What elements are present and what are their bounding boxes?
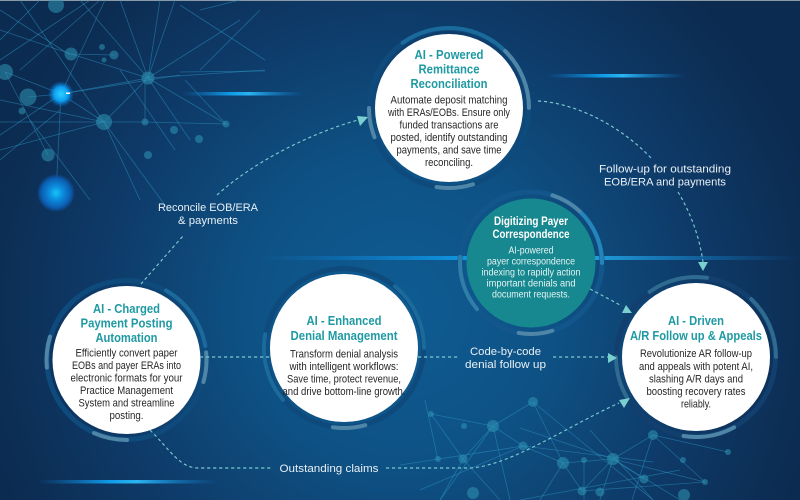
panel: payment posting automation [17, 251, 236, 469]
arrow: reconcile EOB/ERA to remittance [141, 116, 368, 284]
label: reconcile: & payments [178, 215, 238, 227]
body text: AI-powered [508, 246, 554, 256]
body text [70, 348, 183, 422]
body text: Automate deposit matching [390, 94, 508, 106]
icon: bright network node [48, 81, 74, 107]
body text: posting. [110, 410, 144, 422]
body text: important denials and [486, 278, 576, 290]
light streaks [38, 74, 800, 484]
body text: slashing A/R days and [649, 374, 743, 386]
icon: glowing orb [38, 174, 74, 212]
ring [431, 163, 631, 363]
panel: remittance reconciliation [336, 0, 562, 221]
heading [410, 47, 488, 91]
network graphic: bottom right [400, 397, 731, 500]
body text: Revolutionize AR follow-up [640, 348, 752, 360]
body text: System and streamline [78, 398, 175, 410]
body text: posted, identify outstanding [390, 132, 508, 144]
body text: Transform denial analysis [290, 348, 398, 360]
label: follow-up: Follow-up for outstanding [599, 164, 731, 176]
body text: with ERAs/EOBs. Ensure only [387, 107, 511, 119]
arrow: posting to denial management [200, 356, 270, 358]
network graphic: top left [0, 0, 265, 212]
body text [387, 94, 511, 169]
body text: reconciling. [425, 157, 473, 169]
body text: electronic formats for your [70, 372, 183, 384]
body text: EOBs and payer ERAs into [72, 360, 181, 372]
heading: Payment Posting [80, 316, 173, 330]
heading: AI - Charged [93, 301, 160, 316]
body text: and appeals with potent AI, [639, 361, 753, 373]
arrow: follow-up to A/R [538, 101, 708, 271]
body text: Efficiently convert paper [76, 348, 178, 360]
body text [482, 246, 580, 300]
label: outstanding claims: Outstanding claims [280, 463, 378, 475]
heading [492, 214, 570, 241]
label: code-by-code: denial follow up [465, 359, 546, 371]
panel: A/R follow up and appeals [583, 244, 800, 470]
heading: AI - Powered [414, 47, 484, 62]
body text [282, 348, 406, 398]
body text: reliably. [681, 398, 711, 410]
body text: indexing to rapidly action [482, 268, 580, 278]
ring [336, 0, 562, 221]
heading: Automation [96, 330, 158, 345]
ring [583, 244, 800, 470]
heading: Denial Management [290, 328, 398, 343]
arrow: denial management to A/R [418, 353, 617, 363]
body text: Practice Management [80, 385, 173, 397]
body text: with intelligent workflows: [289, 361, 398, 373]
body text: payer correspondence [487, 256, 575, 268]
heading [80, 301, 173, 345]
body text: payments, and save time [396, 144, 502, 156]
body text: and drive bottom-line growth. [282, 386, 406, 398]
label: follow-up: EOB/ERA and payments [604, 176, 726, 188]
body text [639, 348, 753, 410]
label: code-by-code: Code-by-code [470, 346, 541, 358]
body text: Save time, protect revenue, [287, 374, 401, 386]
heading: Digitizing Payer [494, 214, 568, 228]
body text: document requests. [492, 290, 570, 300]
label: code-by-code [465, 346, 546, 371]
heading: AI - Enhanced [306, 313, 382, 328]
heading [290, 313, 398, 343]
heading: AI - Driven [668, 313, 724, 328]
panel: denial management [231, 235, 457, 461]
label: reconcile [158, 202, 259, 227]
label: reconcile: Reconcile EOB/ERA [158, 202, 259, 214]
body text: boosting recovery rates [646, 386, 746, 398]
heading: Correspondence [492, 227, 570, 241]
arrow: outstanding claims [150, 398, 630, 468]
arrow: digitizing to A/R [590, 289, 632, 313]
body text: funded transactions are [400, 120, 499, 132]
label: follow-up [599, 164, 731, 188]
ring [231, 235, 457, 461]
heading: Remittance [418, 62, 480, 76]
ring [17, 251, 236, 469]
heading [630, 313, 762, 343]
panel: digitizing payer correspondence [431, 163, 631, 363]
heading: Reconciliation [410, 76, 488, 91]
heading: A/R Follow up & Appeals [630, 328, 762, 343]
